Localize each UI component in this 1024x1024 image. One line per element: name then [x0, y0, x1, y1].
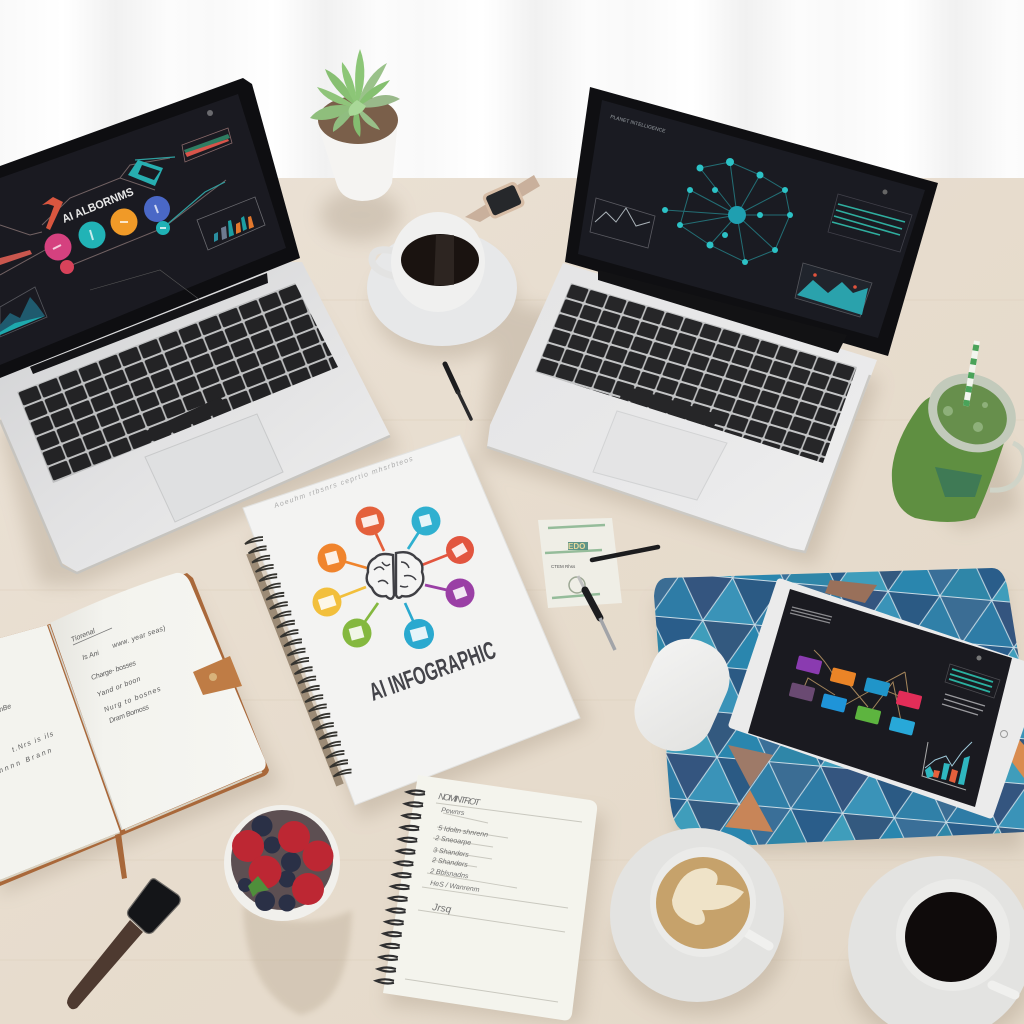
strap stud — [209, 673, 217, 681]
mouse pad — [654, 568, 1024, 845]
base front edge — [487, 375, 870, 552]
tablet — [732, 582, 1024, 815]
handwriting right — [70, 625, 167, 725]
spiral binding — [245, 537, 352, 776]
succulent — [310, 49, 400, 137]
saucer — [610, 828, 784, 1002]
page — [383, 775, 597, 1020]
heading on screen: PLANET INTELLIGENCE — [609, 114, 667, 135]
smartwatch on table — [465, 175, 540, 222]
smartwatch bottom left — [67, 879, 180, 1009]
black coffee cup — [848, 856, 1024, 1024]
left page — [0, 625, 120, 880]
face — [128, 879, 180, 934]
strap — [465, 175, 540, 222]
laptop base — [487, 263, 877, 552]
right laptop — [487, 87, 938, 552]
bottom page edges — [0, 772, 262, 881]
screen bezel — [0, 78, 300, 378]
mauve box — [789, 682, 815, 702]
handwriting right: Dram Bomoss — [108, 704, 151, 725]
pink node — [44, 234, 72, 260]
brown triangle — [725, 790, 773, 832]
handwriting left — [0, 703, 55, 775]
cyan box — [864, 677, 890, 697]
notes: HeS / Wanrenm — [430, 880, 480, 894]
small teal node — [156, 221, 170, 235]
jar rim — [915, 360, 1024, 466]
card sketch: EDO — [568, 542, 585, 551]
handwriting right: Is Ani — [81, 650, 100, 662]
blue box — [821, 693, 847, 713]
open journal — [0, 573, 269, 886]
coffee cup top — [367, 212, 517, 346]
orange node — [110, 208, 138, 236]
icon glyphs — [318, 514, 468, 642]
laptop base — [0, 262, 390, 572]
green box — [855, 705, 881, 725]
notes: 2 Sneoarpe — [434, 835, 472, 847]
screen logo — [882, 190, 888, 194]
strap — [67, 920, 143, 1009]
teal shape cut — [138, 165, 160, 180]
leather cover — [0, 573, 269, 886]
latte cup — [610, 828, 784, 1002]
left bar — [0, 250, 32, 265]
cup — [391, 212, 485, 312]
red box — [896, 690, 922, 710]
connector lines — [327, 521, 460, 634]
handwriting left: t.Nrs is ils — [11, 731, 55, 754]
foam highlights — [943, 402, 988, 432]
top right chart — [182, 128, 232, 162]
handle — [992, 985, 1015, 995]
spine strip — [250, 553, 340, 785]
page gutter — [49, 625, 122, 830]
jar body — [892, 395, 1005, 522]
handwriting right: Charge- bosses — [90, 660, 138, 682]
network hub lines — [665, 162, 790, 262]
handle — [372, 250, 398, 277]
mouse — [622, 627, 742, 763]
hinge — [598, 270, 847, 353]
area chart — [0, 287, 47, 337]
spiral notebook with infographic — [243, 435, 580, 805]
striped straw — [966, 341, 977, 406]
coffee — [401, 234, 479, 286]
handwriting right: Tiorenal — [70, 628, 97, 644]
cover page — [243, 435, 580, 805]
cup — [650, 847, 756, 957]
title on screen: AI ALBORNMS — [61, 186, 136, 226]
saucer — [367, 230, 517, 346]
text box — [828, 194, 912, 252]
network lines — [0, 158, 226, 275]
teal shape — [128, 160, 163, 186]
bowl cast shadow — [243, 905, 352, 1015]
leaf — [248, 876, 269, 897]
left laptop — [0, 78, 390, 573]
notes: NOMINTROT — [438, 791, 482, 808]
red shape — [42, 197, 63, 230]
node glyphs — [53, 205, 166, 249]
spacebar — [133, 397, 230, 447]
blue node — [144, 196, 170, 222]
screen bezel — [565, 87, 938, 356]
handle — [990, 443, 1024, 490]
raspberries — [232, 821, 334, 905]
icon circles — [356, 506, 384, 536]
handwriting right: Nurg to bosnes — [103, 686, 162, 714]
berries bowl — [224, 805, 340, 921]
notes: 2 Shanders — [431, 857, 469, 869]
small red node — [60, 260, 74, 274]
bar chart panel — [197, 197, 265, 250]
blueberries — [238, 816, 301, 912]
trackpad — [145, 414, 283, 522]
purple box — [796, 655, 822, 675]
card sketch — [545, 525, 605, 598]
light blue box — [889, 716, 915, 736]
coffee — [905, 892, 997, 982]
cup — [896, 879, 1010, 991]
notes: 3 Shanders — [433, 847, 470, 859]
area chart — [795, 263, 872, 317]
notes: 5 Idoltn shnrenn — [438, 825, 489, 839]
tablet screen — [748, 589, 1012, 807]
brown top tile — [825, 580, 877, 603]
network nodes — [662, 158, 793, 265]
green smoothie jar — [892, 341, 1024, 522]
teal node — [78, 222, 106, 248]
tablet body — [732, 582, 1024, 815]
flow connectors — [802, 650, 909, 726]
saucer — [848, 856, 1024, 1024]
trackpad — [593, 411, 727, 500]
screen panel — [0, 94, 286, 365]
curtain background — [0, 0, 1024, 180]
ribbon bookmark — [115, 833, 127, 879]
handwriting underline — [73, 628, 112, 645]
keyboard — [535, 283, 857, 463]
pens on card — [578, 547, 658, 650]
plant pot — [310, 49, 400, 201]
sticky card — [538, 518, 622, 608]
notes: 2 Bblsnadns — [429, 868, 469, 880]
latte art — [672, 868, 744, 925]
notes: Jrsq — [431, 902, 452, 916]
keyboard — [17, 283, 338, 483]
card sketch: CTEM Rhss — [551, 564, 576, 569]
hinge — [30, 273, 268, 374]
handwritten header: Aoeuhm rtbsnrs ceprtio mhsrbteos — [272, 456, 414, 510]
orange box — [830, 667, 856, 687]
notes — [429, 791, 489, 916]
top text block — [790, 607, 832, 623]
handwriting right: Yand or boon — [96, 676, 142, 699]
notes: Pewnrs — [441, 807, 465, 817]
right page — [50, 573, 266, 830]
chart — [922, 742, 972, 790]
soil — [318, 96, 398, 144]
tablet logo — [976, 656, 982, 660]
handwriting right: www. year seas) — [111, 625, 167, 650]
leather strap — [193, 656, 242, 695]
dark patch — [935, 467, 982, 497]
watch body — [481, 180, 526, 220]
spacebar — [620, 385, 720, 428]
ruled lines — [405, 803, 582, 1002]
bowl — [224, 805, 340, 921]
left line chart — [590, 198, 655, 248]
pot — [318, 120, 398, 201]
right text block — [942, 664, 1000, 715]
bowl interior — [231, 810, 333, 910]
rings — [376, 790, 425, 983]
pen on table — [445, 364, 471, 419]
handle — [747, 933, 769, 946]
notebook title: AI INFOGRAPHIC — [366, 636, 499, 707]
lined spiral notepad — [376, 775, 597, 1020]
brown triangle dark — [728, 745, 773, 787]
home button — [1000, 730, 1008, 738]
orange right tile — [1012, 735, 1024, 778]
screen panel — [578, 100, 925, 338]
brain icon — [367, 552, 423, 599]
base front edge — [0, 420, 390, 573]
screen logo — [207, 110, 213, 116]
latte — [656, 857, 750, 949]
